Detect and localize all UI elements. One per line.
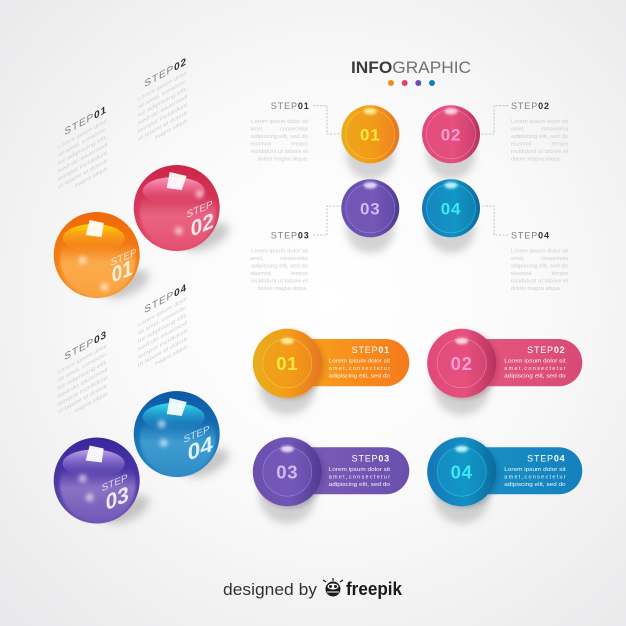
skewed text: step 04: sit amet, consecte-	[138, 304, 187, 337]
label block: step 01: adipiscing elit, sed do	[251, 134, 308, 140]
skewed text: step 04: tur adipiscing elit,	[138, 312, 187, 345]
label block: step 02: dolore magna aliqua.	[511, 157, 561, 163]
large sphere: orange step 01	[54, 212, 153, 304]
pill card: step 04	[427, 437, 582, 524]
small sphere: 01: 01	[360, 125, 381, 144]
skewed text: step 02: sed do eiusmod	[138, 94, 187, 127]
label block: step 04: Lorem ipsum dolor sit	[511, 249, 569, 255]
skewed text: step 01: tur adipiscing elit,	[58, 134, 107, 167]
small sphere: 04: 04	[441, 199, 461, 218]
skewed text: step 01: magna aliqua	[75, 166, 108, 190]
skewed text: step 02: Lorem ipsum dolor	[138, 70, 187, 103]
pill card: step 04: amet,consectetur	[504, 474, 566, 480]
large sphere: purple step 03: STEP	[102, 473, 128, 494]
skewed text: step 01: STEP01	[64, 104, 107, 138]
label block: step 03: eiusmod tempor	[250, 271, 308, 277]
title colour dots	[388, 80, 435, 86]
skewed text: step 02: magna aliqua	[155, 118, 188, 142]
footer credit	[223, 578, 403, 599]
skewed text: step 03	[58, 328, 108, 424]
label block: step 02: adipiscing elit, sed do	[511, 134, 568, 140]
connector: step 03	[313, 206, 341, 235]
small sphere: 02	[422, 105, 480, 179]
pill card: step 02: 02	[451, 353, 473, 374]
skewed text: step 02	[138, 55, 188, 151]
label block: step 04: STEP04	[511, 231, 550, 241]
footer credit: designed by	[223, 580, 318, 599]
pill card: step 04: STEP04	[527, 453, 566, 463]
pill card: step 02: Lorem ipsum dolor sit	[504, 359, 566, 365]
pill card: step 01: 01	[276, 353, 298, 374]
label block: step 03: incididunt ut labore et	[251, 278, 309, 284]
label block: step 04	[511, 231, 569, 292]
label block: step 04: adipiscing elit, sed do	[511, 264, 568, 270]
label block: step 01: incididunt ut labore et	[251, 149, 309, 155]
skewed text: step 03: Lorem ipsum dolor	[58, 343, 107, 376]
small sphere: 02: 02	[441, 125, 461, 144]
skewed text: step 04: sed do eiusmod	[138, 320, 187, 353]
skewed text: step 03: tempor incididunt	[58, 375, 107, 408]
label block: step 03	[250, 231, 310, 292]
pill card: step 02: amet,consectetur	[504, 366, 566, 372]
label block: step 03: amet, consectetur	[250, 256, 308, 262]
label block: step 01: dolore magna aliqua.	[258, 157, 308, 163]
large sphere: blue step 04: STEP	[184, 424, 210, 446]
skewed text: step 02: tur adipiscing elit,	[138, 86, 187, 119]
skewed text: step 01: tempor incididunt	[58, 150, 107, 183]
connector: step 01	[313, 106, 340, 134]
title: INFOGRAPHIC	[351, 58, 471, 77]
pill card: step 01: Lorem ipsum dolor sit	[329, 359, 391, 365]
skewed text: step 03: tur adipiscing elit,	[58, 359, 107, 392]
label block: step 01: Lorem ipsum dolor sit	[251, 119, 309, 125]
skewed text: step 01: sed do eiusmod	[58, 142, 107, 175]
large sphere: purple step 03: 03	[106, 481, 129, 515]
large sphere: pink step 02: STEP	[187, 199, 213, 221]
small sphere: 03: 03	[360, 199, 381, 218]
label block: step 01: eiusmod tempor	[250, 142, 308, 148]
skewed text: step 04: Lorem ipsum dolor	[138, 296, 187, 329]
footer credit: freepik	[346, 579, 403, 599]
pill card: step 03	[253, 437, 409, 524]
label block: step 04: amet, consectetur	[511, 256, 569, 262]
skewed text: step 03: magna aliqua	[75, 391, 108, 415]
large sphere: orange step 01: 01	[112, 254, 133, 288]
large sphere: purple step 03	[54, 438, 153, 530]
label block: step 03: dolore magna aliqua.	[258, 286, 308, 292]
pill card: step 03: 03	[276, 461, 298, 482]
skewed text: step 04: tempor incididunt	[138, 328, 187, 361]
small sphere: 01	[341, 105, 399, 179]
skewed text: step 04: magna aliqua	[155, 344, 188, 368]
pill card: step 03: Lorem ipsum dolor sit	[329, 467, 391, 473]
skewed text: step 04: ut labore et dolore	[138, 336, 187, 369]
label block: step 03: STEP03	[271, 231, 310, 241]
pill card: step 01: STEP01	[352, 345, 390, 355]
pill card: step 04: Lorem ipsum dolor sit	[504, 467, 566, 473]
skewed text: step 02: STEP02	[144, 56, 187, 90]
pill card: step 02: STEP02	[527, 345, 566, 355]
label block: step 04: dolore magna aliqua.	[511, 286, 561, 292]
large sphere: pink step 02: 02	[191, 207, 214, 242]
skewed text: step 01: ut labore et dolore	[58, 158, 107, 191]
pill card: step 03: adipiscing elit, sed do	[329, 482, 390, 488]
skewed text: step 03: STEP03	[64, 329, 107, 363]
label block: step 03: adipiscing elit, sed do	[251, 264, 308, 270]
skewed text: step 03: sit amet, consecte-	[58, 351, 107, 384]
label block: step 03: Lorem ipsum dolor sit	[251, 249, 309, 255]
skewed text: step 03: sed do eiusmod	[58, 367, 107, 400]
label block: step 02: eiusmod tempor	[511, 142, 569, 148]
large sphere: orange step 01: STEP	[111, 247, 137, 269]
pill card: step 01: adipiscing elit, sed do	[329, 374, 390, 380]
skewed text: step 01: Lorem ipsum dolor	[58, 118, 107, 151]
pill card: step 01: amet,consectetur	[329, 366, 390, 372]
skewed text: step 02: sit amet, consecte-	[138, 78, 187, 111]
pill card: step 02: adipiscing elit, sed do	[504, 374, 566, 380]
connector: step 02	[481, 106, 508, 134]
label block: step 02: STEP02	[511, 101, 550, 111]
skewed text: step 04	[138, 281, 188, 377]
skewed text: step 02: ut labore et dolore	[138, 110, 187, 143]
label block: step 01: STEP01	[271, 101, 310, 111]
skewed text: step 03: ut labore et dolore	[58, 383, 107, 416]
pill card: step 01	[253, 329, 409, 415]
large sphere: blue step 04: 04	[188, 430, 213, 466]
skewed text: step 02: tempor incididunt	[138, 102, 187, 135]
label block: step 02: incididunt ut labore et	[511, 149, 569, 155]
skewed text: step 04: STEP04	[144, 282, 187, 316]
small sphere: 03	[341, 179, 399, 253]
label block: step 02	[511, 101, 569, 163]
pill card: step 02	[427, 329, 582, 415]
connector: step 04	[481, 206, 508, 235]
label block: step 02: amet, consectetur	[511, 126, 569, 132]
small sphere: 04	[422, 179, 480, 253]
label block: step 04: incididunt ut labore et	[511, 278, 569, 284]
pill card: step 04: 04	[451, 461, 473, 482]
large sphere: blue step 04	[134, 391, 233, 483]
skewed text: step 01: sit amet, consecte-	[58, 126, 107, 159]
skewed text: step 01	[58, 103, 108, 199]
pill card: step 04: adipiscing elit, sed do	[504, 482, 566, 488]
label block: step 02: Lorem ipsum dolor sit	[511, 119, 569, 125]
large sphere: pink step 02	[134, 165, 233, 257]
label block: step 04: eiusmod tempor	[511, 271, 569, 277]
pill card: step 03: STEP03	[352, 453, 390, 463]
label block: step 01	[250, 101, 310, 163]
pill card: step 03: amet,consectetur	[329, 474, 390, 480]
label block: step 01: amet, consectetur	[250, 126, 308, 132]
